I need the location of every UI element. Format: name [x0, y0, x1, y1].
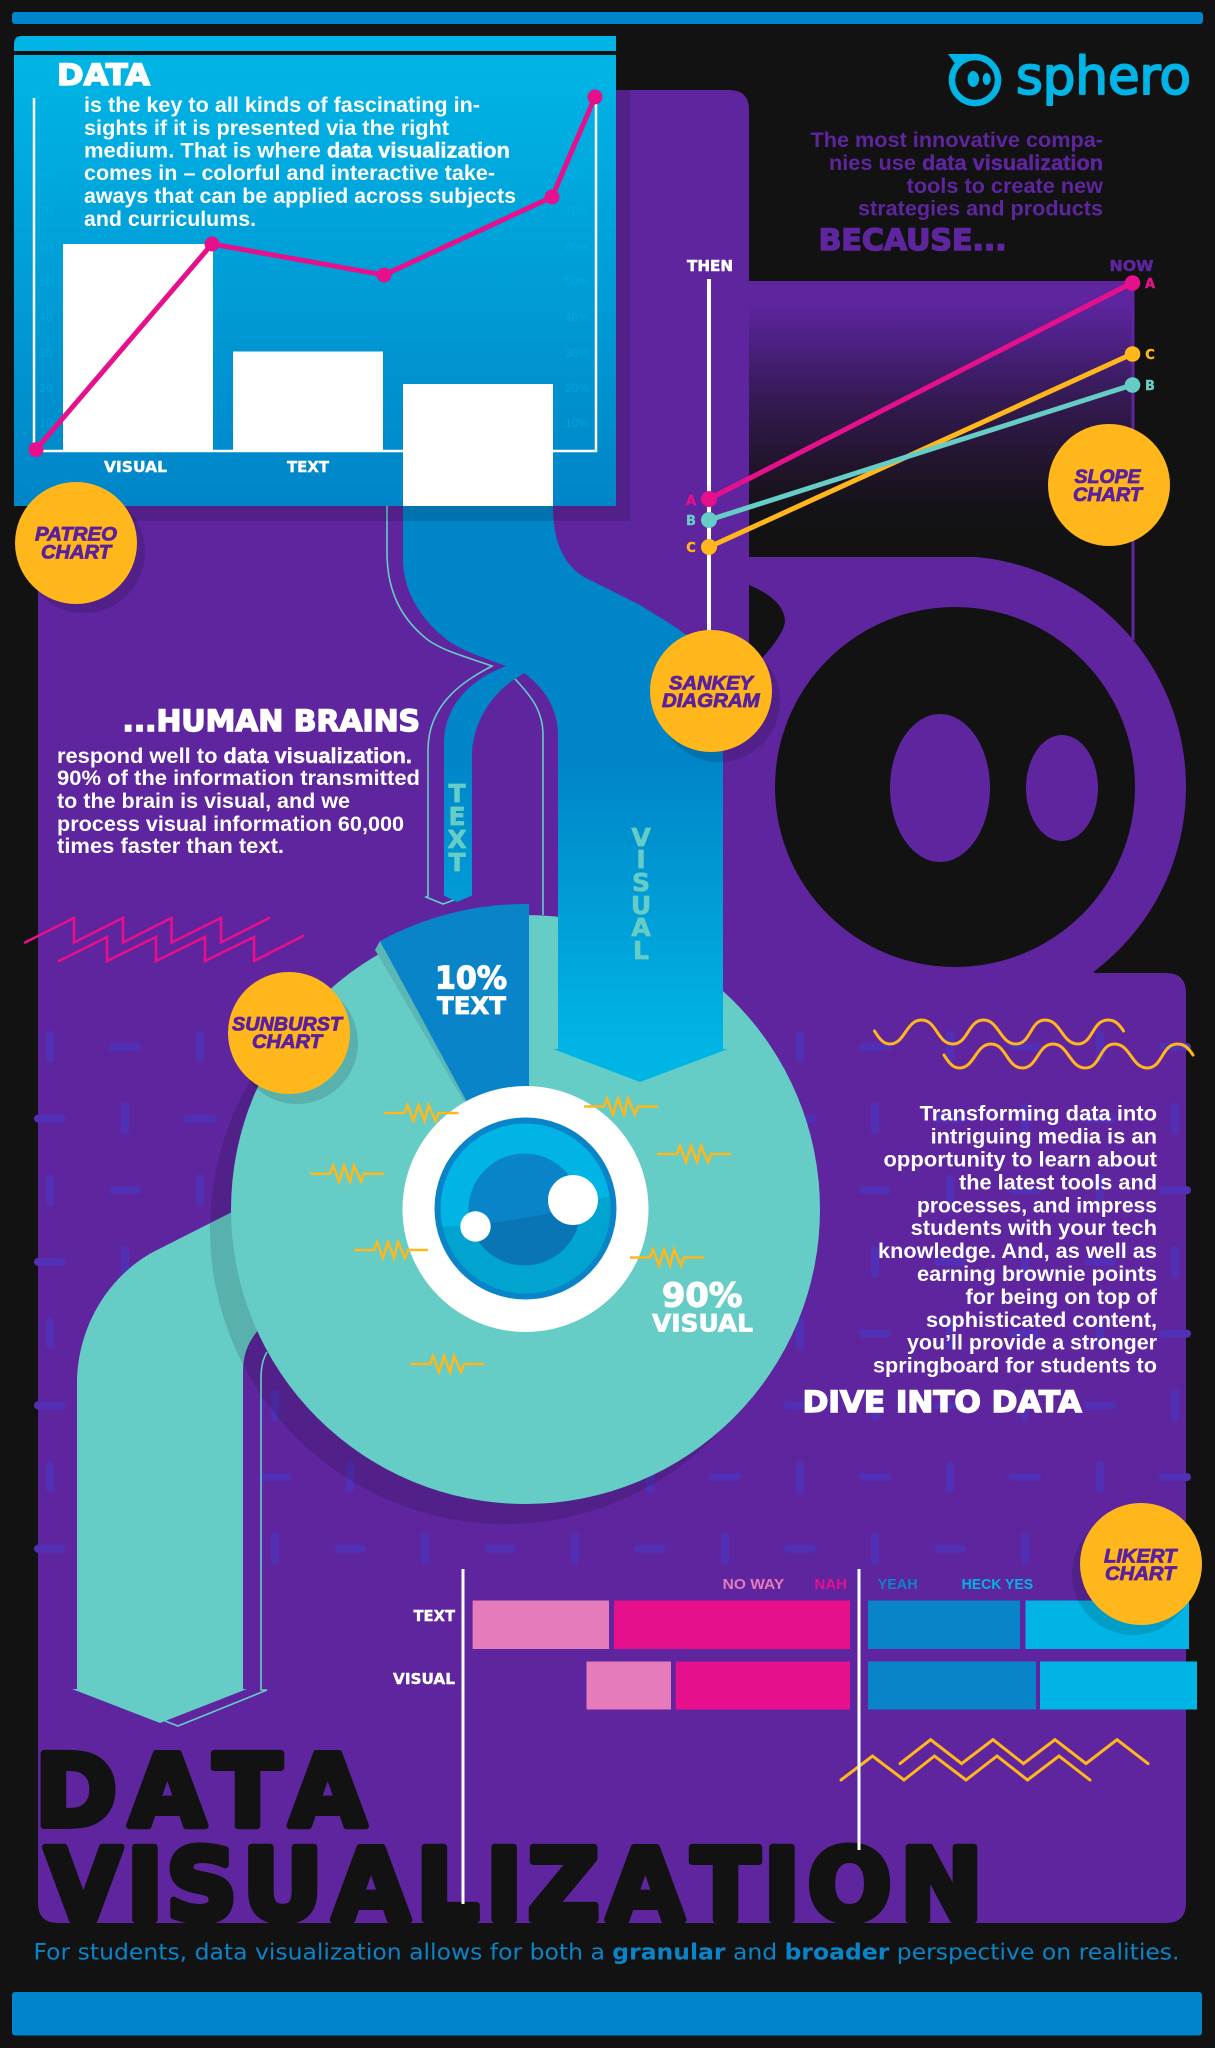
faint axis tick labels: 10%: [565, 416, 589, 430]
text: transforming data: Transforming data into: [920, 1103, 1157, 1126]
faint axis tick labels: 50%: [565, 275, 589, 289]
slope axes: [709, 279, 1133, 640]
text: human brains: 90% of the information transmitted: [57, 767, 420, 790]
faint axis tick labels: 90: [39, 133, 53, 147]
text: companies: nies use data visualization: [829, 152, 1103, 175]
likert legend: NO WAY: [723, 1577, 785, 1593]
slope axis titles: NOW: [1110, 257, 1154, 275]
sankey diagram blue flow: [403, 506, 728, 1082]
text: transforming data: springboard for students to: [873, 1355, 1157, 1378]
sankey label: TEXT: T: [448, 779, 466, 808]
faint axis tick labels: 50: [39, 275, 53, 289]
badge: slope chart: SLOPE: [1074, 467, 1142, 488]
sunburst label: 90% visual: VISUAL: [652, 1310, 753, 1338]
text: transforming data: for being on top of: [966, 1286, 1157, 1309]
likert row labels: VISUAL: [393, 1670, 455, 1688]
chart axes: [34, 98, 596, 451]
badge: sunburst chart: [228, 972, 358, 1104]
robot face: black circle with two eyes: [775, 607, 1135, 967]
heading: DATA: DATA: [57, 58, 151, 92]
faint axis tick labels: 80: [39, 169, 53, 183]
yellow wave decoration: [874, 1020, 1193, 1068]
icon: sphero logo: sphero: [1016, 47, 1191, 107]
text: human brains: [57, 704, 420, 858]
title: data visualization: [35, 1734, 983, 1944]
badge: likert chart: LIKERT: [1104, 1546, 1178, 1567]
badge: slope chart: [1048, 424, 1170, 546]
panel: data / patreo chart: [14, 36, 616, 506]
sankey label: TEXT: T: [448, 848, 466, 877]
text: transforming data: earning brownie points: [917, 1263, 1157, 1286]
sunburst wedge: 10% text: 10%: [435, 960, 507, 996]
text: transforming data: processes, and impress: [917, 1194, 1157, 1217]
text: transforming data: sophisticated content,: [926, 1309, 1157, 1332]
top bar: [12, 12, 1203, 24]
footer sentence: For students, data visualization allows for both a granular and broader perspective on realities.: [34, 1941, 1180, 1966]
teal outgoing flow arrow: [72, 1208, 300, 1723]
sankey label: TEXT: X: [447, 825, 467, 854]
text: data intro: [84, 94, 516, 231]
badge: sunburst chart: CHART: [252, 1032, 323, 1053]
badge: likert chart: [1072, 1503, 1202, 1635]
text: transforming data: intriguing media is an: [931, 1126, 1157, 1149]
line series: [28, 90, 602, 457]
slope chart: [686, 257, 1155, 640]
text: data intro: aways that can be applied across subjects: [84, 185, 516, 208]
likert chart: [393, 1569, 1197, 1904]
likert legend: HECK YES: [962, 1577, 1033, 1593]
badge: patreo chart: [15, 482, 145, 613]
badge: sankey diagram: SANKEY: [669, 674, 755, 695]
likert row labels: [393, 1607, 456, 1688]
sunburst chart circle: [231, 915, 820, 1504]
text: data intro: and curriculums.: [84, 208, 256, 231]
slope labels: A: [686, 494, 696, 509]
yellow zigzag decoration: [841, 1740, 1148, 1780]
slope labels: C: [1145, 348, 1155, 363]
faint axis tick labels: 60%: [565, 240, 589, 254]
panel shadow: data panel: [38, 90, 630, 521]
likert row labels: TEXT: [414, 1607, 456, 1625]
faint axis tick labels: 20: [39, 381, 53, 395]
likert legend: [723, 1577, 1033, 1593]
faint axis tick labels: 10: [39, 416, 53, 430]
icon: yellow resistor squiggles: [310, 1098, 731, 1372]
badge: sankey diagram: DIAGRAM: [662, 691, 761, 712]
flow outlines: [165, 506, 543, 1726]
text: transforming data: knowledge. And, as well as: [878, 1240, 1157, 1263]
text: human brains: respond well to data visualization.: [57, 745, 412, 768]
text: transforming data: [873, 1103, 1157, 1378]
sunburst shadow: [210, 934, 800, 1524]
faint axis tick labels: [39, 133, 589, 430]
text: human brains: ...HUMAN BRAINS: [122, 704, 420, 738]
text: transforming data: the latest tools and: [959, 1171, 1157, 1194]
text: human brains: process visual information 60,000: [57, 813, 404, 836]
badge: patreo chart: CHART: [41, 542, 112, 563]
slope chart backdrop: [749, 281, 1134, 557]
slope dots: [701, 275, 1140, 555]
axis labels: [104, 458, 330, 476]
text: data intro: comes in – colorful and interactive take-: [84, 162, 495, 185]
badge: patreo chart: PATREO: [35, 524, 117, 546]
sankey label: VISUAL: V: [631, 823, 651, 852]
text: transforming data: you’ll provide a stronger: [907, 1332, 1157, 1355]
sunburst wedge: 10% text: TEXT: [437, 992, 507, 1020]
badge: likert chart: CHART: [1105, 1564, 1177, 1585]
text: data intro: medium. That is where data visualization: [84, 140, 510, 162]
sankey label: TEXT: [447, 779, 467, 877]
sankey label: VISUAL: U: [631, 891, 651, 920]
heading: dive into data: DIVE INTO DATA: [803, 1385, 1082, 1419]
faint axis tick labels: 60: [39, 240, 53, 254]
likert axis lines: [463, 1569, 859, 1904]
text: human brains: to the brain is visual, and we: [57, 790, 350, 813]
heading: BECAUSE: BECAUSE...: [819, 223, 1007, 257]
text: companies: strategies and products: [858, 198, 1103, 220]
text: transforming data: students with your tech: [911, 1217, 1157, 1240]
text: data intro: is the key to all kinds of fascinating in-: [84, 94, 480, 117]
bars: [63, 244, 553, 506]
likert bars: visual row: [586, 1662, 1197, 1710]
text: companies: [810, 129, 1104, 220]
axis labels: VISUAL: [104, 458, 167, 476]
text: data intro: sights if it is presented via the right: [84, 117, 449, 140]
title: data visualization: DATA: [35, 1734, 366, 1850]
slope series lines: [709, 283, 1132, 547]
sankey label: TEXT: E: [448, 802, 466, 831]
faint axis tick labels: 30: [39, 346, 53, 360]
faint axis tick labels: 20%: [565, 381, 589, 395]
slope axis titles: THEN: [687, 257, 733, 275]
text: companies: The most innovative compa-: [810, 129, 1103, 152]
sunburst wedge: 10% text: [375, 904, 529, 1106]
slope labels: B: [686, 514, 696, 529]
sankey label: VISUAL: A: [631, 913, 651, 942]
slope labels: [686, 277, 1155, 556]
slope labels: A: [1145, 277, 1155, 292]
sunburst label: 90% visual: [652, 1276, 753, 1338]
title: data visualization: VISUALIZATION: [45, 1828, 983, 1944]
icon: eye: [402, 1086, 648, 1332]
sunburst label: 90% visual: 90%: [662, 1276, 742, 1314]
slope labels: B: [1145, 379, 1155, 394]
likert legend: YEAH: [878, 1577, 918, 1593]
faint axis tick labels: 40%: [565, 310, 589, 324]
slope labels: C: [686, 541, 696, 556]
badge: sankey diagram: [650, 630, 780, 762]
faint axis tick labels: 30%: [565, 346, 589, 360]
sankey label: VISUAL: L: [633, 936, 649, 965]
faint axis tick labels: 70: [39, 204, 53, 218]
pink zigzag decoration: [25, 918, 303, 961]
text: transforming data: opportunity to learn about: [884, 1148, 1157, 1172]
badge: sunburst chart: SUNBURST: [232, 1015, 343, 1036]
sankey label: VISUAL: S: [632, 868, 650, 897]
badge: slope chart: CHART: [1073, 485, 1143, 506]
text: companies: tools to create new: [907, 175, 1104, 198]
axis labels: TEXT: [287, 458, 330, 476]
faint axis tick labels: 70%: [565, 204, 589, 218]
bottom bar: [12, 1992, 1202, 2036]
slope axis titles: [687, 257, 1154, 275]
sankey label: VISUAL: [631, 823, 651, 965]
likert legend: NAH: [814, 1577, 847, 1593]
text: human brains: times faster than text.: [57, 835, 284, 858]
faint axis tick labels: 80%: [565, 169, 589, 183]
faint axis tick labels: 40: [39, 310, 53, 324]
likert bars: text row: [473, 1600, 1189, 1649]
sankey label: VISUAL: I: [636, 845, 646, 874]
